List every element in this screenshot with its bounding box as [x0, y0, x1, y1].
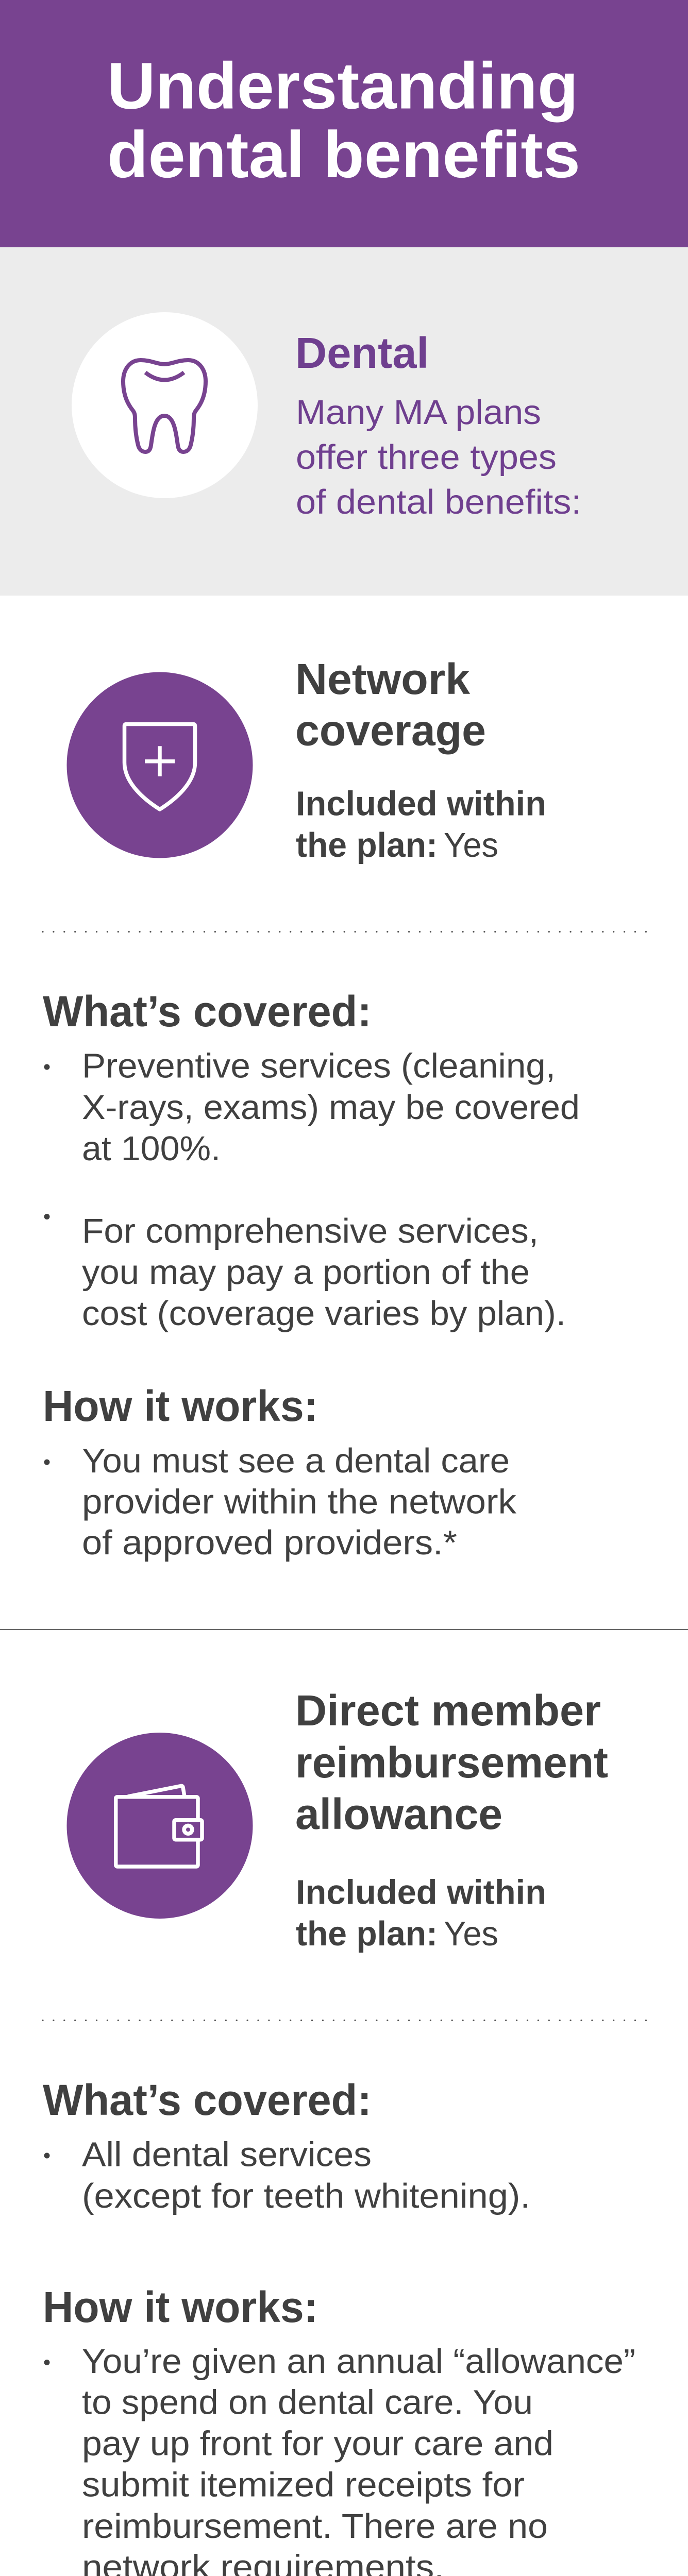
text: included within the plan: Yes: [444, 1914, 498, 1953]
icon: wallet: [67, 1733, 253, 1919]
bullet: annual allowance: pay up front for your care and: [82, 2425, 553, 2463]
icon: tooth: [72, 312, 258, 498]
heading: dental: Dental: [295, 329, 429, 377]
heading: network coverage: [295, 655, 486, 754]
text: intro: offer three types: [296, 438, 557, 477]
bullet: annual allowance: submit itemized receipts for: [82, 2466, 525, 2504]
bullet: comprehensive services: For comprehensive services,: [82, 1212, 539, 1250]
bullet: comprehensive services: you may pay a portion of the: [82, 1253, 530, 1292]
heading: direct member reimbursement allowance: [295, 1686, 608, 1838]
heading: how it works: How it works:: [43, 1382, 318, 1430]
panel: direct member reimbursement allowance: [43, 1686, 646, 2576]
heading: how it works: How it works:: [43, 2283, 318, 2331]
text: intro: Many MA plans: [296, 393, 541, 432]
title: [107, 49, 580, 192]
text: intro: [296, 393, 581, 521]
bullet: comprehensive services: cost (coverage varies by plan).: [82, 1294, 566, 1333]
bullet: annual allowance: to spend on dental care. You: [82, 2383, 533, 2421]
bullet: all dental services: [44, 2135, 530, 2215]
heading: network coverage: coverage: [295, 706, 486, 754]
panel: dental intro: [0, 247, 688, 596]
panel: title header: [0, 0, 688, 247]
text: included within the plan: Yes: [444, 826, 498, 865]
bullet: annual allowance: You’re given an annual “allowance”: [82, 2342, 635, 2381]
bullet: preventive services: [44, 1047, 580, 1168]
text: included within the plan: Included within: [296, 784, 546, 823]
text: included within the plan: Included within: [296, 1873, 546, 1911]
text: included within the plan: [296, 1873, 546, 1953]
heading: direct member reimbursement allowance: allowance: [295, 1790, 502, 1838]
bullet: preventive services: at 100%.: [82, 1129, 221, 1168]
heading: direct member reimbursement allowance: reimbursement: [295, 1738, 608, 1787]
heading: direct member reimbursement allowance: Direct member: [295, 1686, 601, 1735]
bullet: network requirement: You must see a dental care: [82, 1442, 510, 1480]
title: Understanding: [107, 49, 578, 123]
heading: network coverage: Network: [295, 655, 470, 703]
panel: network coverage: [43, 655, 646, 1562]
bullet: preventive services: X-rays, exams) may be covered: [82, 1088, 580, 1127]
bullet: annual allowance: [44, 2342, 635, 2576]
icon: shield with plus: [67, 672, 253, 858]
text: included within the plan: the plan:: [296, 826, 438, 865]
bullet: all dental services: All dental services: [82, 2135, 372, 2174]
heading: what's covered: What’s covered:: [43, 2076, 372, 2124]
title: dental benefits: [107, 118, 580, 192]
bullet: annual allowance: reimbursement. There are no: [82, 2507, 548, 2546]
text: intro: of dental benefits:: [296, 483, 581, 521]
bullet: comprehensive services: [44, 1212, 566, 1333]
bullet: network requirement: of approved providers.*: [82, 1523, 457, 1562]
bullet: preventive services: Preventive services (cleaning,: [82, 1047, 556, 1085]
bullet: all dental services: (except for teeth whitening).: [82, 2177, 530, 2215]
bullet: network requirement: provider within the network: [82, 1483, 517, 1521]
text: included within the plan: [296, 784, 546, 865]
text: included within the plan: the plan:: [296, 1914, 438, 1953]
heading: what's covered: What’s covered:: [43, 987, 372, 1036]
bullet: network requirement: [44, 1442, 517, 1562]
